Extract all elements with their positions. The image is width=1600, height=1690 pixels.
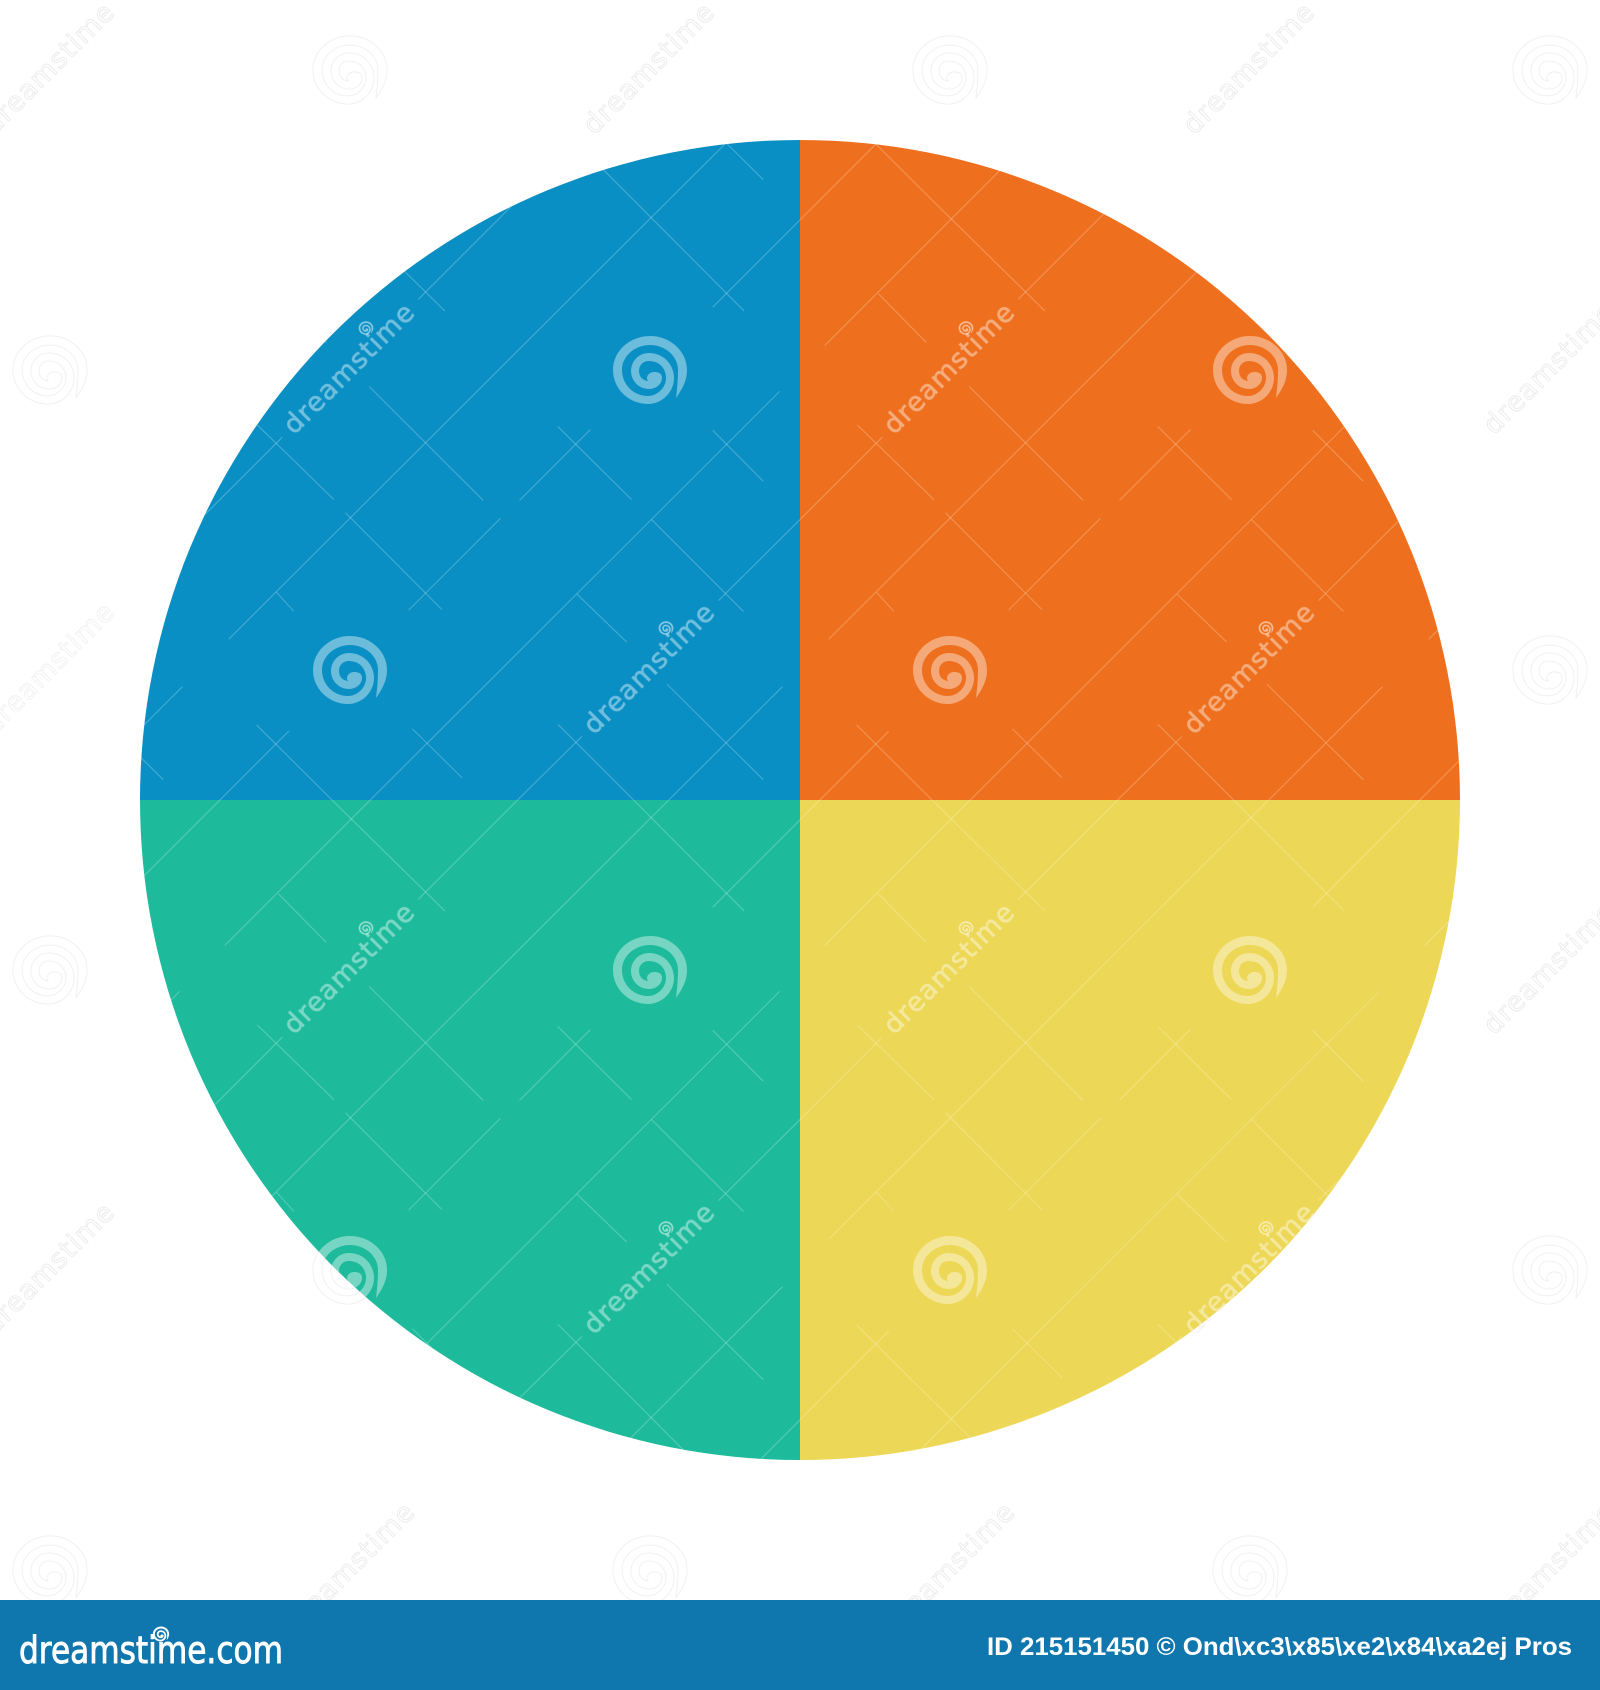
faint watermark outlines on white background: dreamstime <box>877 1497 1021 1641</box>
faint watermark outlines on white background: dreamstime <box>1177 0 1321 141</box>
pie slice: green, bottom left <box>140 800 800 1460</box>
footer bar <box>0 1600 1600 1690</box>
pie chart: four equal quarters <box>140 140 1460 1460</box>
footer image id and credit: ID 215151450 © Ond\xc3\x85\xe2\x84\xa2ej Pros <box>987 1633 1572 1661</box>
faint watermark outlines on white background: dreamstime <box>577 0 721 141</box>
watermark text: dreamstime <box>577 597 721 741</box>
watermark text: dreamstime <box>577 1197 721 1341</box>
footer logo text: dreamstime.com <box>19 1629 283 1672</box>
pie slice: orange, top right <box>800 140 1460 800</box>
pie slice: yellow, bottom right <box>800 800 1460 1460</box>
watermark text: dreamstime <box>877 897 1021 1041</box>
watermark text: dreamstime <box>277 897 421 1041</box>
watermark text: dreamstime <box>877 297 1021 441</box>
faint watermark outlines on white background: dreamstime <box>277 297 421 441</box>
watermark text <box>0 297 1321 1341</box>
watermark text: dreamstime <box>277 297 421 441</box>
small watermark spirals above text <box>59 321 1273 1235</box>
icon: logo spiral <box>153 1627 169 1641</box>
pie slice: blue, top left <box>140 140 800 800</box>
watermark text: dreamstime <box>1177 1197 1321 1341</box>
watermark text: dreamstime <box>1177 597 1321 741</box>
faint watermark outlines on white background: dreamstime <box>277 1497 421 1641</box>
faint watermark outlines on white background: dreamstime <box>1177 1197 1321 1341</box>
